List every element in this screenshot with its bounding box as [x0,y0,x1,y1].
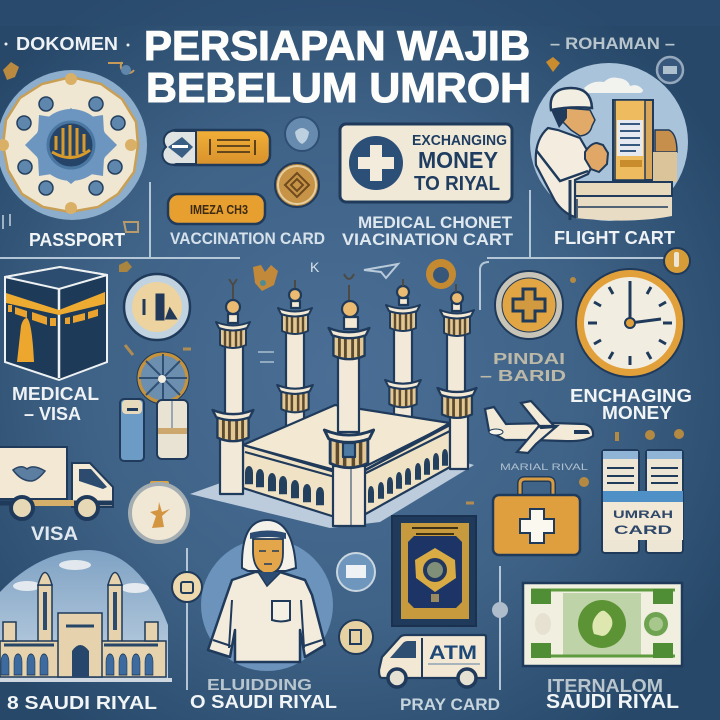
label: flight cart: FLIGHT CART [554,228,675,248]
icon: umrah card booklet: CARD [614,523,673,537]
label: medical chonet: VIACINATION CART [342,231,513,249]
icon: side circles [337,553,375,654]
building [243,405,450,517]
label: pray card: PRAY CARD [400,695,500,714]
connector lines [0,182,665,690]
icon: line circle [172,572,202,602]
icon: airplane [485,401,593,453]
label: enchaging money: MONEY [602,403,672,423]
icon: small ornaments top [3,57,683,232]
label: marial: MARIAL RIVAL [500,462,588,473]
icon: clock [576,269,684,377]
icon: bottles [120,399,188,461]
label: eluidding to saudi riyal: O SAUDI RIYAL [190,692,337,712]
icon: gauge circle [130,481,188,542]
back minarets [277,286,421,428]
icon: passport book [392,516,476,626]
panel: exchanging money [340,124,512,202]
title [144,22,531,111]
panel: exchanging money: MONEY [418,147,498,173]
icon: orange pill [168,194,265,224]
icon: atm van: ATM [429,643,477,664]
label: eluidding to saudi riyal [190,677,337,712]
label: medical chonet: MEDICAL CHONET [358,214,512,232]
icon: small gold clip [664,248,690,274]
icon: medical briefcase [493,479,580,555]
heading: dokumen: DOKOMEN [16,34,118,54]
icon: truck [0,447,113,519]
panel: exchanging money: TO RIYAL [414,173,500,195]
icon: passport medallion [0,70,147,220]
icon: blue circle [285,117,319,151]
label: internalom saudi riyal: SAUDI RIYAL [546,691,679,713]
icon: id card [162,130,270,165]
icon: plus circle [495,271,563,339]
finials [229,274,456,300]
label: eluidding to saudi riyal: ELUIDDING [207,677,312,694]
icon: atm van [379,635,486,687]
label: medical chonet [342,214,513,249]
label: medical visa: – VISA [24,404,81,424]
illustration: mosque [190,274,477,528]
icon: mosque scene [0,550,172,682]
icon: umrah card booklet: UMRAH [613,509,673,521]
icon: small spark ornaments right [570,277,684,487]
label: pindai barid: PINDAI [493,351,565,368]
icon: kaaba [5,267,107,380]
label: internalom saudi riyal: ITERNALOM [547,676,663,696]
title: PERSIAPAN WAJIB [144,22,530,69]
icon: man in white robe [201,520,333,671]
label: medical visa: MEDICAL [12,384,99,404]
label: saudi riyal left: 8 SAUDI RIYAL [7,693,157,713]
label: visa: VISA [31,524,78,545]
icon: line knob [492,602,508,618]
label: vaccination card: VACCINATION CARD [170,230,325,248]
label: enchaging money [570,386,692,423]
front minarets [213,292,477,526]
icon: coin circle [124,274,190,340]
label: passport: PASSPORT [29,230,125,250]
floating glyphs around mosque: K [310,259,320,275]
icon: saudi banknote [523,583,682,666]
arches [245,449,448,505]
icon: gold circle [275,163,319,207]
icon: wheel [137,352,189,404]
label: medical visa [12,384,99,424]
panel: exchanging money: EXCHANGING [412,133,507,149]
icon: umrah card booklet [602,450,683,553]
label: internalom saudi riyal [546,676,679,713]
label: enchaging money: ENCHAGING [570,386,692,406]
platform [190,455,474,528]
icon: orange pill: IMEZA CH3 [190,202,248,217]
title: BEBELUM UMROH [146,64,531,111]
heading: rohaman: – ROHAMAN – [550,34,675,53]
label: pindai barid [480,351,566,385]
icon: person praying at flight board [530,63,688,221]
floating glyphs around mosque [119,259,474,503]
label: pindai barid: – BARID [480,368,566,385]
